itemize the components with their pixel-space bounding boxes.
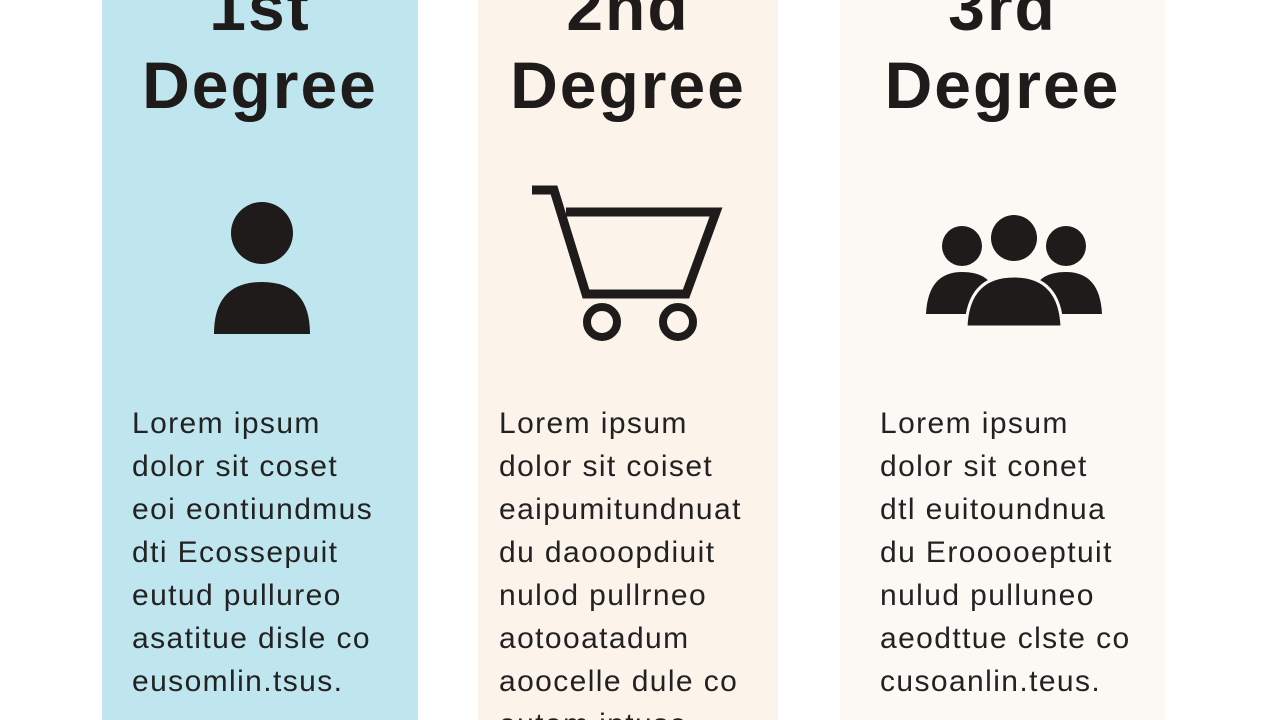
panel: 1st degree	[102, 0, 418, 720]
text block: eaipumitundnuat	[499, 493, 742, 526]
text block: aeodttue clste co	[880, 622, 1131, 655]
text block: aoocelle dule co	[499, 665, 738, 698]
text block	[880, 407, 1131, 698]
text block: Lorem ipsum	[132, 407, 321, 440]
text block: eusomlin.tsus.	[132, 665, 343, 698]
heading: 1st Degree	[142, 0, 378, 122]
text block: cusoanlin.teus.	[880, 665, 1101, 698]
icon: person	[214, 202, 310, 334]
text block: eutud pullureo	[132, 579, 342, 612]
text block: du Erooooeptuit	[880, 536, 1113, 569]
text block: dolor sit conet	[880, 450, 1088, 483]
heading: 2nd Degree: Degree	[510, 48, 746, 122]
text block: nulod pullrneo	[499, 579, 707, 612]
heading: 1st Degree: Degree	[142, 48, 378, 122]
text block: nulud pulluneo	[880, 579, 1095, 612]
heading: 3rd Degree	[885, 0, 1120, 122]
heading: 2nd Degree	[510, 0, 746, 122]
text block: dti Ecossepuit	[132, 536, 338, 569]
icon: shopping cart	[532, 186, 722, 341]
text block: dolor sit coset	[132, 450, 338, 483]
heading: 3rd Degree: Degree	[885, 48, 1120, 122]
text block	[132, 407, 373, 698]
text block: eoi eontiundmus	[132, 493, 373, 526]
text block: aotooatadum	[499, 622, 690, 655]
text block: Lorem ipsum	[880, 407, 1069, 440]
text block: dtl euitoundnua	[880, 493, 1106, 526]
text block	[499, 407, 742, 720]
panel: 3rd degree	[840, 0, 1165, 720]
text block: dolor sit coiset	[499, 450, 713, 483]
text block: Lorem ipsum	[499, 407, 688, 440]
text block: asatitue disle co	[132, 622, 371, 655]
icon: group	[926, 215, 1102, 326]
text block: du daooopdiuit	[499, 536, 715, 569]
panel: 2nd degree	[478, 0, 778, 720]
